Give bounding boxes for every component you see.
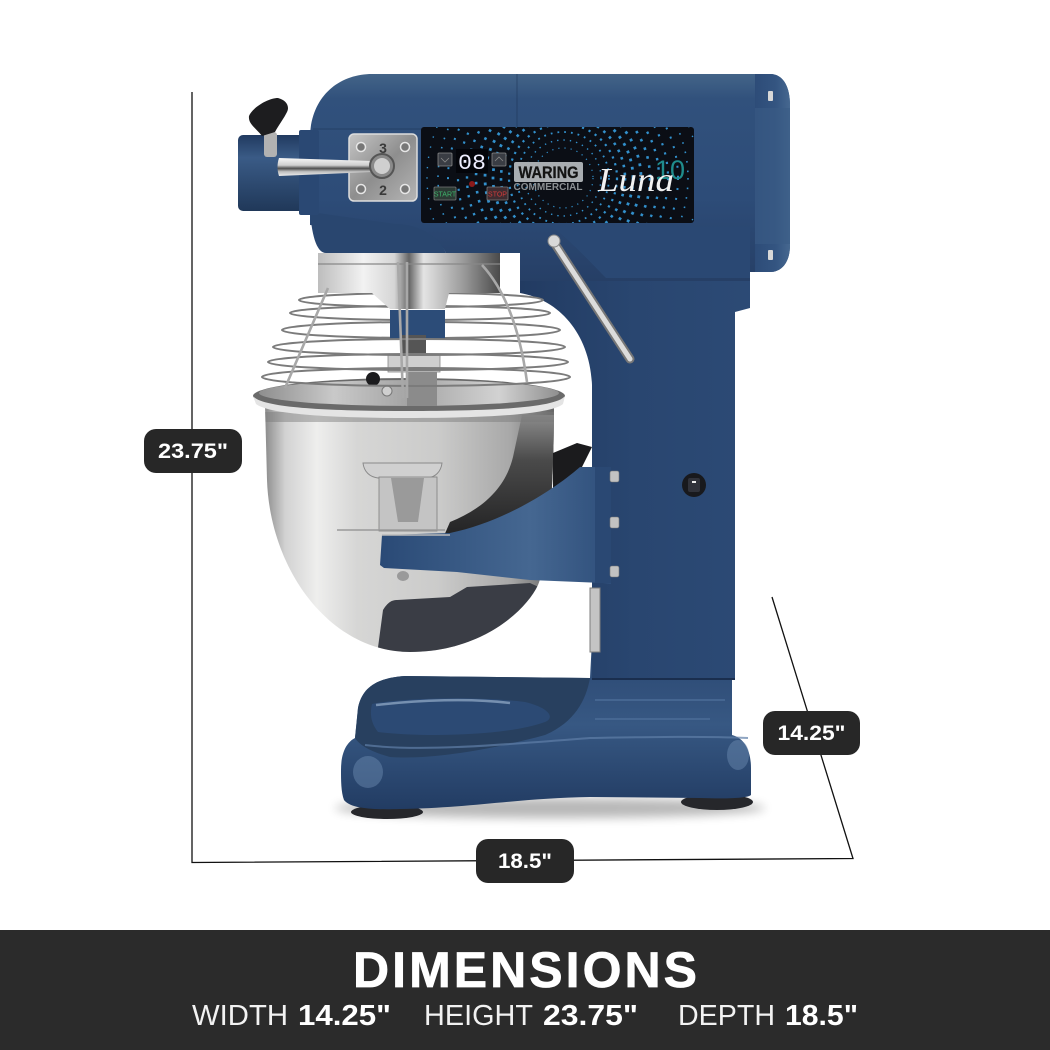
depth spec: DEPTH [678, 1000, 775, 1032]
stop button [487, 187, 508, 200]
depth spec: 18.5" [785, 1000, 858, 1032]
waring logo: WARING [518, 163, 578, 182]
stainless bowl body [253, 372, 565, 660]
base shadow [335, 798, 765, 818]
head lower curve [310, 210, 446, 253]
stop button: STOP [488, 192, 507, 198]
depth spec [678, 1000, 858, 1032]
heading: DIMENSIONS [353, 942, 697, 998]
rear cap [755, 74, 790, 272]
attachment hub cylinder [238, 130, 319, 215]
dot pattern [426, 127, 694, 223]
bowl reflections [265, 412, 558, 660]
rocker switch [682, 473, 706, 497]
model 10: 10 [655, 155, 685, 185]
bowl knob [366, 372, 392, 396]
tilt lever [548, 235, 630, 359]
height spec: 23.75" [543, 1000, 638, 1032]
control panel [421, 127, 694, 223]
speed plate: 3 [379, 140, 387, 156]
pedestal highlights [595, 700, 725, 719]
start button: START [434, 192, 457, 198]
gearbox hub [318, 253, 500, 406]
width spec: WIDTH [192, 1000, 288, 1032]
column [520, 270, 750, 680]
luna script: Luna [597, 162, 674, 199]
speed lever [278, 158, 372, 176]
bowl support arm [380, 443, 619, 584]
display [456, 149, 488, 173]
mixer head [310, 74, 790, 281]
footer panel [0, 930, 1050, 1050]
mixer illustration [238, 42, 790, 819]
rubber feet [351, 794, 753, 819]
start button [434, 187, 457, 200]
waring logo [514, 162, 583, 193]
bowl interior [253, 378, 565, 414]
badge: height 23.75 [144, 429, 242, 473]
badge: depth 18.5: 18.5" [498, 850, 552, 873]
height spec [424, 1000, 638, 1032]
width spec [192, 1000, 391, 1032]
speed plate [278, 134, 417, 201]
dimension lines [192, 92, 853, 862]
waring logo: COMMERCIAL [514, 181, 583, 193]
bowl guard wire [262, 262, 570, 398]
mixing shaft in bowl [407, 372, 437, 406]
bowl rim front [253, 396, 565, 418]
arm bolts [610, 471, 619, 577]
height spec: HEIGHT [424, 1000, 533, 1032]
mixer base [341, 640, 751, 809]
bowl lift bar [590, 588, 600, 652]
arrow buttons [438, 153, 506, 166]
badge: width 14.25: 14.25" [778, 722, 846, 745]
locking knob [249, 98, 288, 157]
badge: height 23.75: 23.75" [158, 440, 228, 463]
indicator light [469, 181, 475, 187]
control panel: 08 [458, 151, 486, 176]
head lower band [552, 227, 750, 278]
bowl hook clip [337, 463, 445, 581]
badge: width 14.25 [763, 711, 860, 755]
badge: depth 18.5 [476, 839, 574, 883]
bowl guard rear rings [282, 293, 560, 338]
head seam [313, 74, 518, 129]
column seam [592, 678, 735, 680]
speed plate: 2 [379, 182, 387, 198]
width spec: 14.25" [298, 1000, 391, 1032]
